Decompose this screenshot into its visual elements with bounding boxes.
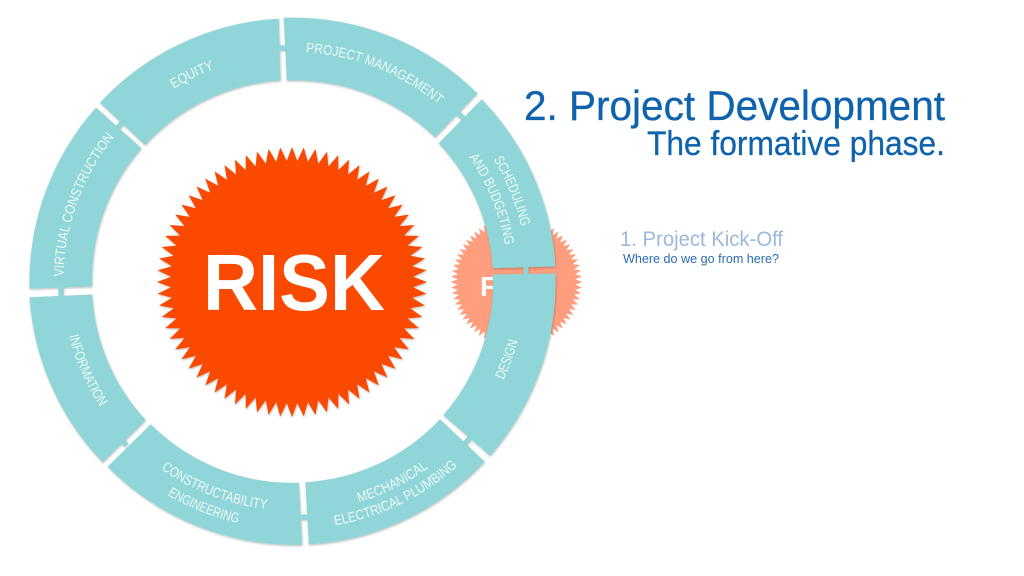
RISK label: RISK <box>203 238 385 327</box>
faded starburst behind ring: F <box>480 271 497 302</box>
previous step heading: 1. Project Kick-Off <box>620 228 783 251</box>
segment: Design <box>443 267 558 458</box>
segment: Scheduling and Budgeting: AND BUDGETING <box>469 154 514 244</box>
segment: Project Management <box>280 18 478 139</box>
segment: Equity <box>100 18 282 146</box>
segment: Equity: EQUITY <box>170 60 211 88</box>
segment: Mechanical Electrical Plumbing: ELECTRICAL PLUMBING <box>334 460 456 526</box>
faded starburst behind ring <box>451 216 582 348</box>
subtitle: The formative phase. <box>647 125 945 163</box>
segment: Virtual Construction <box>28 108 142 296</box>
segment: Virtual Construction: VIRTUAL CONSTRUCTION <box>54 132 114 276</box>
segment: Information: INFORMATION <box>69 334 108 406</box>
segment: Information <box>29 294 147 464</box>
segment: Constructability Engineering: ENGINEERING <box>168 487 239 522</box>
segment: Constructability Engineering <box>108 424 308 547</box>
segment: Mechanical Electrical Plumbing <box>305 420 486 546</box>
segment: Design: DESIGN <box>495 339 518 380</box>
segment: Scheduling and Budgeting <box>438 100 557 270</box>
segment: Constructability Engineering: CONSTRUCTABILITY <box>163 462 268 509</box>
title: 2. Project Development <box>524 82 945 129</box>
segment: Project Management: PROJECT MANAGEMENT <box>306 42 444 103</box>
segment: Scheduling and Budgeting: SCHEDULING <box>494 156 530 226</box>
ring of segments <box>28 18 558 547</box>
previous step caption: Where do we go from here? <box>623 252 779 266</box>
segment: Mechanical Electrical Plumbing: MECHANICAL <box>357 462 428 502</box>
central RISK starburst <box>157 147 427 417</box>
